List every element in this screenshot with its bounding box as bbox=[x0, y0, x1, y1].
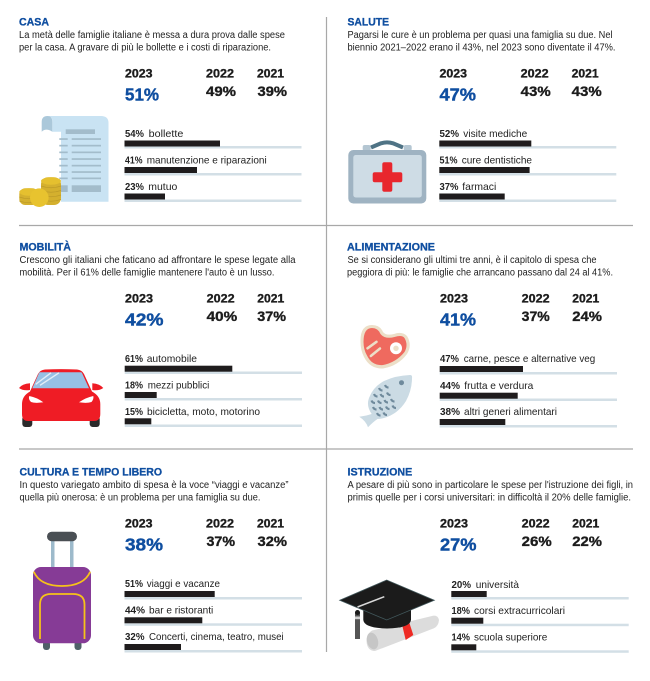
yearly figures: casa: 49% bbox=[206, 84, 236, 99]
icon: bill and coins bbox=[19, 116, 108, 207]
bar chart: cultura bbox=[124, 578, 302, 652]
heading: alimentazione: ALIMENTAZIONE bbox=[347, 242, 435, 254]
bar chart: alimentazione: 47% bbox=[440, 353, 460, 365]
bar chart: alimentazione: 38% bbox=[440, 406, 461, 418]
panel: casa bbox=[19, 16, 302, 207]
bar chart: casa: manutenzione e riparazioni bbox=[147, 154, 267, 166]
bar chart: istruzione: scuola superiore bbox=[474, 632, 547, 644]
yearly figures: alimentazione: 41% bbox=[440, 310, 476, 330]
bar chart: istruzione: 18% bbox=[452, 605, 471, 617]
bar chart: mobilita: 61% bbox=[125, 353, 144, 365]
bar chart: salute bbox=[439, 128, 616, 202]
bar chart: alimentazione bbox=[440, 353, 617, 428]
bar chart: istruzione: 14% bbox=[452, 632, 471, 644]
icon: graduation cap and diploma bbox=[340, 580, 439, 651]
bar chart: salute: cure dentistiche bbox=[462, 154, 532, 166]
yearly figures: cultura: 37% bbox=[206, 534, 235, 549]
yearly figures: alimentazione: 2023 bbox=[440, 292, 468, 306]
description: salute: biennio 2021–2022 erano il 43%, nel 2023 sono diventate il 47%. bbox=[348, 42, 616, 54]
yearly figures: alimentazione: 37% bbox=[522, 309, 550, 324]
yearly figures: salute: 2021 bbox=[572, 66, 599, 80]
panel: cultura bbox=[20, 466, 302, 652]
description: mobilita: Crescono gli italiani che faticano ad affrontare le spese legate alla bbox=[20, 255, 296, 266]
bar chart: cultura: 44% bbox=[125, 604, 146, 616]
bar chart: salute: 37% bbox=[440, 181, 459, 193]
bar chart: casa bbox=[124, 128, 302, 202]
yearly figures: cultura: 2023 bbox=[125, 516, 153, 530]
bar chart: casa: 23% bbox=[125, 181, 145, 193]
description: alimentazione bbox=[347, 255, 613, 278]
bar chart: casa: 41% bbox=[125, 154, 143, 166]
yearly figures: cultura bbox=[125, 516, 287, 554]
bar chart: salute: 51% bbox=[440, 154, 458, 166]
yearly figures: alimentazione: 2021 bbox=[572, 292, 600, 306]
description: salute bbox=[348, 30, 616, 54]
icon: meat steak bbox=[360, 325, 410, 369]
yearly figures: salute bbox=[440, 66, 602, 104]
description: cultura: quella più onerosa: è un problema per una famiglia su due. bbox=[20, 492, 260, 504]
bar chart: casa: 54% bbox=[125, 128, 145, 140]
bar chart: cultura: 51% bbox=[125, 578, 144, 590]
heading: istruzione: ISTRUZIONE bbox=[348, 466, 412, 478]
description: cultura: In questo variegato ambito di spesa è la voce “viaggi e vacanze” bbox=[20, 480, 288, 491]
yearly figures: istruzione: 22% bbox=[572, 534, 602, 549]
bar chart: cultura: bar e ristoranti bbox=[149, 604, 213, 616]
yearly figures: casa: 2022 bbox=[206, 66, 234, 80]
panel: alimentazione bbox=[347, 242, 617, 428]
yearly figures: salute: 2022 bbox=[521, 66, 549, 80]
yearly figures: casa bbox=[125, 66, 287, 104]
description: istruzione bbox=[348, 480, 633, 504]
bar chart: casa: mutuo bbox=[148, 181, 177, 193]
description: casa: per la casa. A gravare di più le bollette e i costi di riparazione. bbox=[19, 42, 271, 54]
panel: istruzione bbox=[340, 466, 633, 653]
yearly figures: istruzione: 26% bbox=[522, 534, 552, 549]
yearly figures: istruzione: 2022 bbox=[522, 516, 550, 530]
yearly figures: mobilita: 2022 bbox=[207, 292, 235, 306]
yearly figures: istruzione: 27% bbox=[440, 534, 477, 554]
description: istruzione: primis quelle per i corsi universitari: in difficoltà il 20% delle famiglie. bbox=[348, 492, 631, 504]
bar chart: mobilita: bicicletta, moto, motorino bbox=[147, 406, 260, 418]
bar chart: salute: visite mediche bbox=[463, 128, 527, 140]
bar chart: alimentazione: carne, pesce e alternative veg bbox=[464, 353, 595, 365]
yearly figures: mobilita: 2021 bbox=[257, 292, 285, 306]
icon: purple suitcase bbox=[33, 532, 91, 650]
yearly figures: mobilita: 42% bbox=[125, 310, 164, 330]
yearly figures: alimentazione: 2022 bbox=[522, 292, 550, 306]
bar chart: salute: farmaci bbox=[462, 181, 496, 193]
yearly figures: cultura: 32% bbox=[258, 534, 287, 549]
bar chart: istruzione: corsi extracurricolari bbox=[474, 605, 565, 617]
bar chart: mobilita: mezzi pubblici bbox=[148, 380, 209, 392]
icon: first aid kit bbox=[348, 142, 426, 204]
bar chart: mobilita: 18% bbox=[125, 380, 144, 392]
yearly figures: casa: 39% bbox=[258, 84, 287, 99]
yearly figures: casa: 2021 bbox=[257, 66, 284, 80]
heading: cultura e tempo libero: CULTURA E TEMPO LIBERO bbox=[20, 466, 162, 478]
description: mobilita: mobilità. Per il 61% delle famiglie mantenere l'auto è un lusso. bbox=[20, 268, 274, 278]
description: casa bbox=[19, 30, 285, 54]
yearly figures: salute: 43% bbox=[521, 84, 551, 99]
description: cultura bbox=[20, 480, 288, 504]
yearly figures: alimentazione bbox=[440, 292, 602, 330]
description: salute: Pagarsi le cure è un problema per quasi una famiglia su due. Nel bbox=[348, 30, 612, 41]
yearly figures: istruzione: 2021 bbox=[572, 516, 600, 530]
heading: salute: SALUTE bbox=[348, 16, 389, 28]
heading: mobilita: MOBILITÀ bbox=[20, 240, 71, 254]
yearly figures: mobilita bbox=[125, 292, 286, 330]
yearly figures: cultura: 2021 bbox=[257, 516, 284, 530]
panel: salute bbox=[348, 16, 616, 204]
bar chart: salute: 52% bbox=[440, 128, 460, 140]
bar chart: alimentazione: frutta e verdura bbox=[464, 380, 533, 392]
yearly figures: salute: 47% bbox=[440, 84, 476, 104]
bar chart: mobilita: automobile bbox=[147, 353, 197, 365]
bar chart: cultura: viaggi e vacanze bbox=[147, 578, 220, 590]
yearly figures: mobilita: 37% bbox=[257, 309, 286, 324]
bar chart: alimentazione: altri generi alimentari bbox=[464, 406, 557, 418]
panel: mobilita bbox=[19, 240, 302, 427]
description: istruzione: A pesare di più sono in particolare le spese per l'istruzione dei figli, in bbox=[348, 480, 633, 491]
yearly figures: casa: 51% bbox=[125, 84, 159, 104]
bar chart: alimentazione: 44% bbox=[440, 380, 461, 392]
bar chart: istruzione: università bbox=[476, 579, 519, 591]
yearly figures: istruzione bbox=[440, 516, 602, 554]
icon: fish bbox=[359, 375, 412, 427]
yearly figures: istruzione: 2023 bbox=[440, 516, 468, 530]
yearly figures: mobilita: 2023 bbox=[125, 292, 153, 306]
heading: casa: CASA bbox=[19, 16, 49, 28]
bar chart: mobilita: 15% bbox=[125, 406, 144, 418]
bar chart: casa: bollette bbox=[149, 128, 183, 140]
description: alimentazione: Se si considerano gli ultimi tre anni, è il capitolo di spesa che bbox=[348, 255, 597, 266]
bar chart: mobilita bbox=[125, 353, 302, 427]
description: casa: La metà delle famiglie italiane è messa a dura prova dalle spese bbox=[19, 30, 285, 41]
bar chart: istruzione: 20% bbox=[452, 579, 472, 591]
yearly figures: cultura: 2022 bbox=[206, 516, 234, 530]
yearly figures: mobilita: 40% bbox=[207, 309, 237, 324]
yearly figures: casa: 2023 bbox=[125, 66, 153, 80]
bar chart: istruzione bbox=[451, 579, 629, 653]
icon: red car bbox=[19, 369, 103, 427]
bar chart: cultura: 32% bbox=[125, 631, 145, 643]
yearly figures: salute: 43% bbox=[572, 84, 602, 99]
yearly figures: salute: 2023 bbox=[440, 66, 467, 80]
yearly figures: alimentazione: 24% bbox=[572, 309, 602, 324]
description: mobilita bbox=[20, 255, 296, 278]
bar chart: cultura: Concerti, cinema, teatro, musei bbox=[149, 631, 284, 643]
yearly figures: cultura: 38% bbox=[125, 534, 163, 554]
description: alimentazione: peggiora di più: le famiglie che arrancano passano dal 24 al 41%. bbox=[347, 268, 613, 278]
